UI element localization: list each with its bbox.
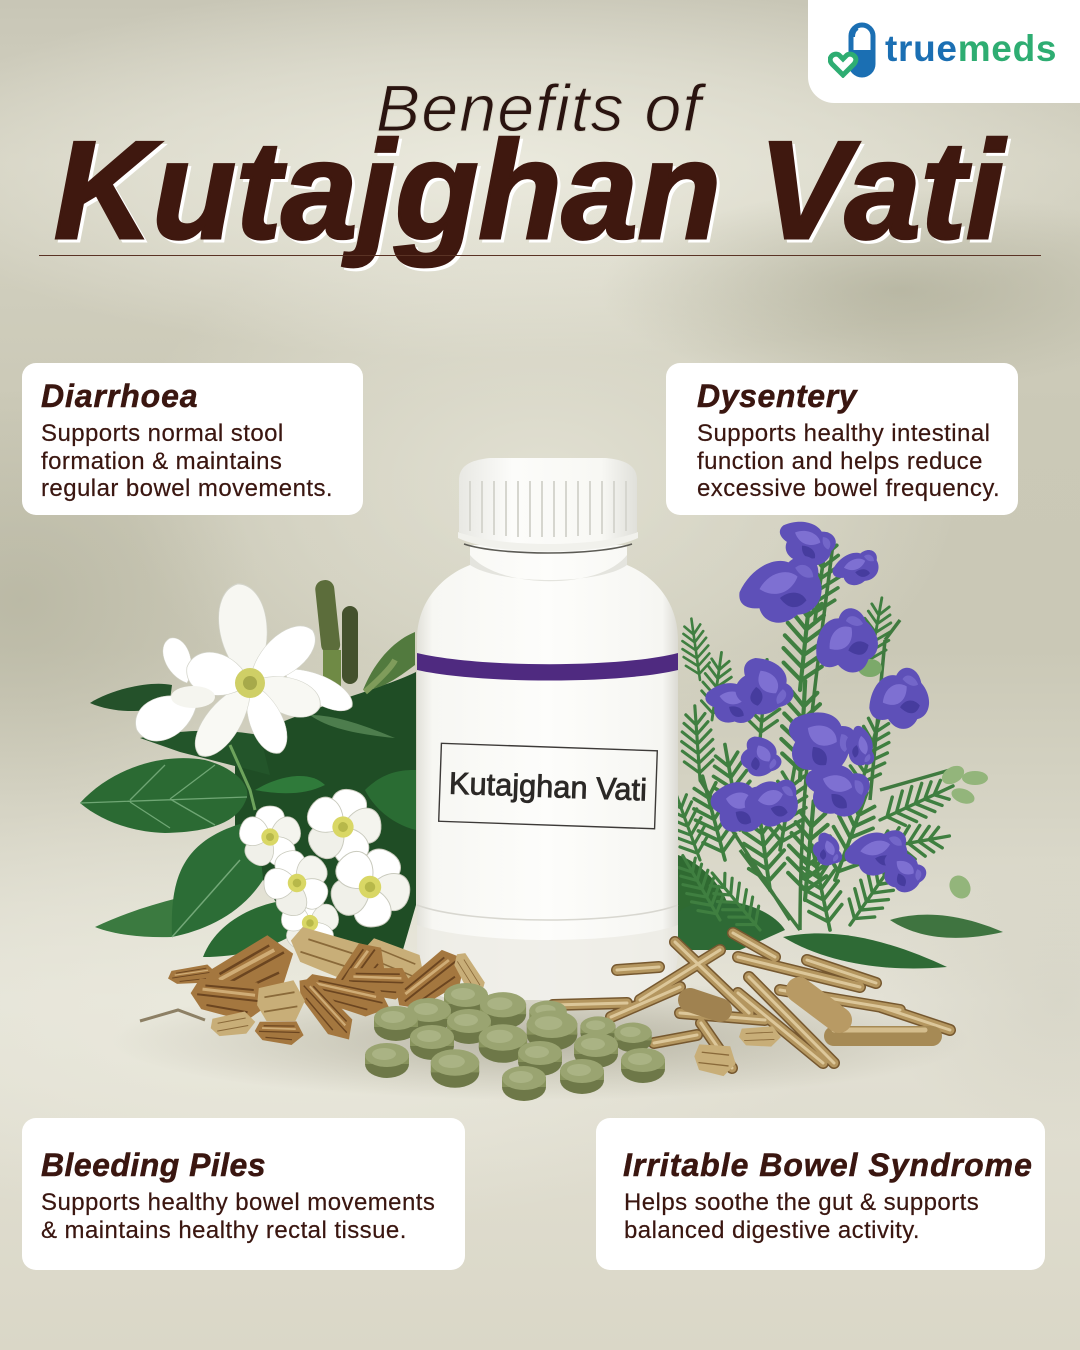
text block: Supports normal stool	[41, 420, 284, 447]
ground shadow	[110, 980, 970, 1100]
title underline	[39, 255, 1041, 256]
text block	[41, 420, 333, 502]
text block: excessive bowel frequency.	[697, 475, 1000, 502]
right foliage	[660, 532, 1003, 968]
panel: Diarrhoea	[22, 363, 363, 515]
dried herbs: right	[553, 933, 950, 1078]
panel: Irritable Bowel Syndrome	[596, 1118, 1045, 1270]
heading: Irritable Bowel Syndrome	[623, 1147, 1033, 1183]
text block: function and helps reduce	[697, 448, 983, 474]
text block	[697, 420, 1000, 502]
text block: Helps soothe the gut & supports	[624, 1189, 979, 1216]
heading: Dysentery	[697, 378, 857, 414]
plant: right purple flowers	[660, 513, 1003, 968]
text block	[41, 1189, 435, 1244]
dried herbs: left	[140, 920, 490, 1048]
panel: Bleeding Piles	[22, 1118, 465, 1270]
text block: & maintains healthy rectal tissue.	[41, 1216, 407, 1244]
title: Kutajghan Vati: Kutajghan Vati	[57, 116, 1009, 271]
left foliage	[80, 632, 416, 960]
text block: regular bowel movements.	[41, 475, 333, 502]
illustration: bottle with herbs	[80, 458, 1003, 1101]
text block: formation & maintains	[41, 448, 282, 474]
title: Kutajghan Vati: Kutajghan Vati	[54, 113, 1006, 268]
heading: Bleeding Piles	[41, 1147, 266, 1183]
panel: Dysentery	[666, 363, 1018, 515]
logo tab	[808, 0, 1080, 103]
bottle label: Kutajghan Vati	[448, 766, 648, 807]
small white flowers	[236, 780, 428, 954]
logo wordmark: truemeds	[885, 28, 1057, 69]
bottle label	[439, 743, 657, 829]
text block	[624, 1189, 979, 1244]
large white flower	[128, 581, 358, 765]
bottle	[417, 458, 678, 1000]
logo icon	[828, 22, 876, 78]
tablets	[365, 983, 665, 1101]
buds	[314, 579, 358, 700]
plant: left white flowers	[80, 579, 428, 960]
text block: balanced digestive activity.	[624, 1216, 920, 1244]
text block: Supports healthy bowel movements	[41, 1189, 435, 1216]
heading: Diarrhoea	[41, 378, 198, 414]
text block: Supports healthy intestinal	[697, 420, 990, 447]
title: Benefits of: Benefits of	[376, 71, 702, 145]
purple flowers	[702, 513, 939, 900]
